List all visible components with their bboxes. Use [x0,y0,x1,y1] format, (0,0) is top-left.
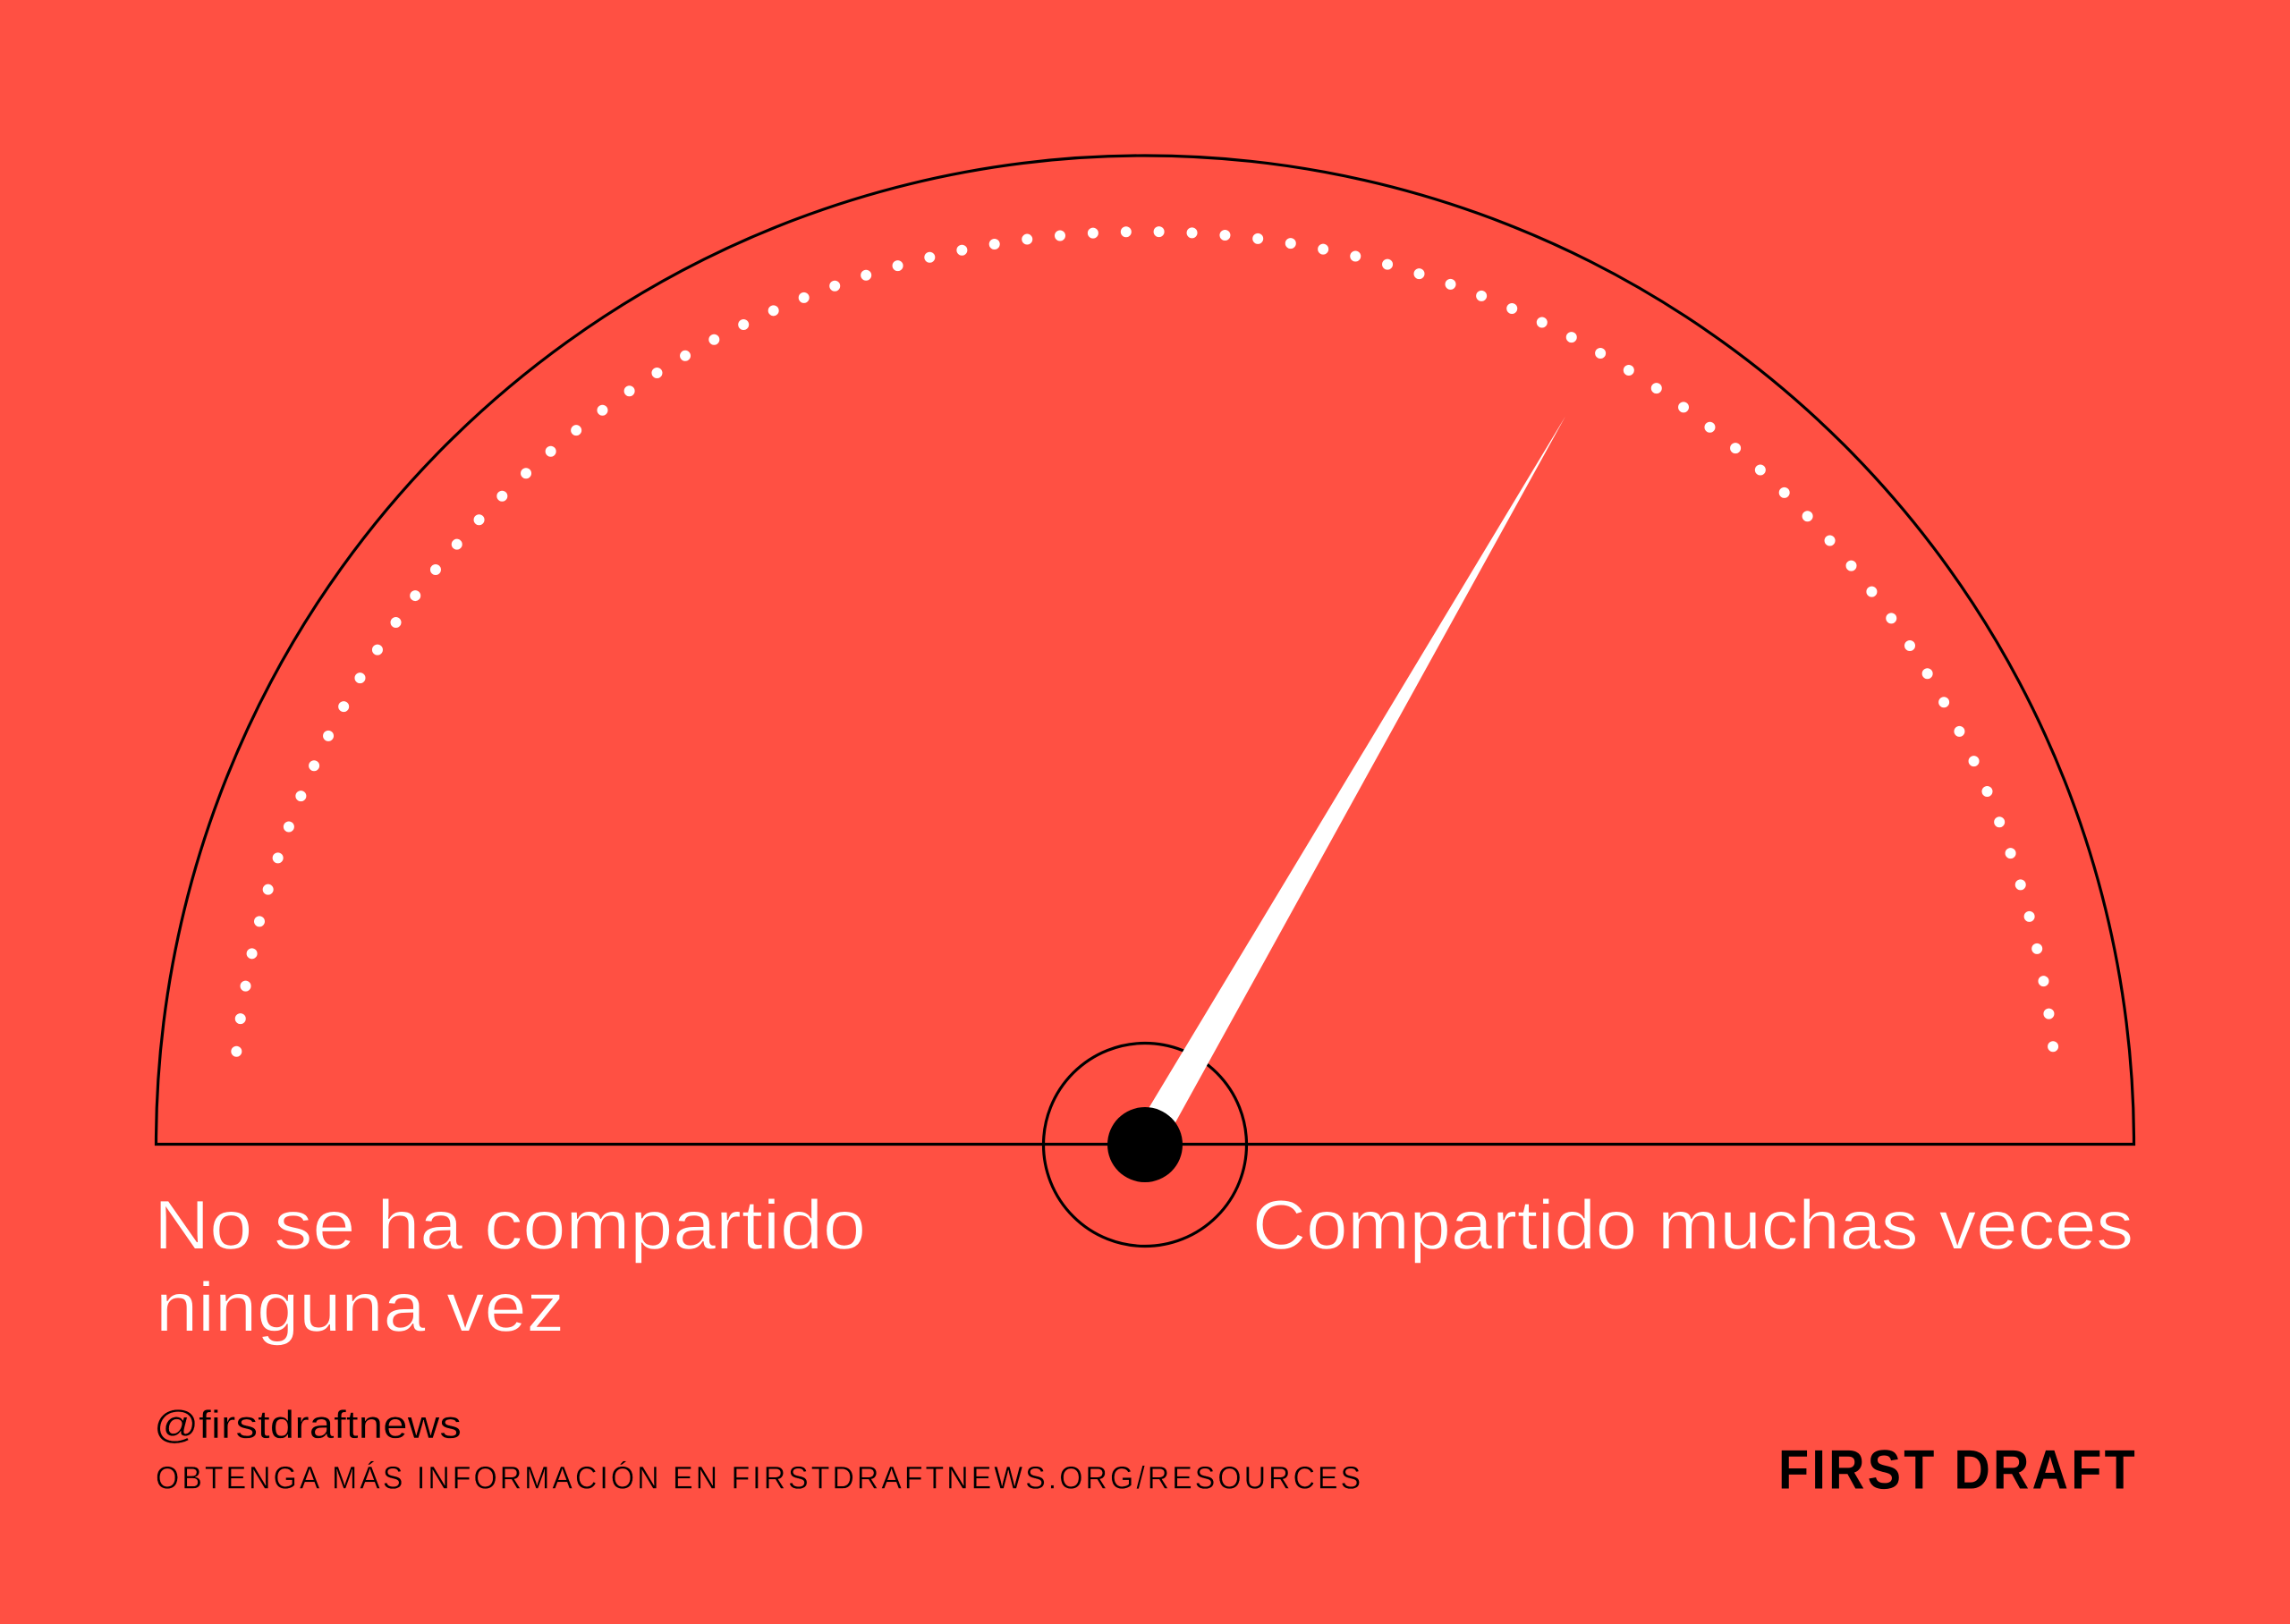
label: low end of the scale: No se ha compartido [154,1186,866,1265]
gauge [156,156,2134,1247]
hub outer ring [1043,1043,1247,1247]
hub centre [1107,1107,1183,1182]
dotted scale arc [236,232,2053,1052]
label: low end of the scale: ninguna vez [156,1268,564,1347]
needle [1142,417,1565,1132]
logo wordmark: FIRST DRAFT [1778,1440,2135,1501]
social handle: @firstdraftnews [154,1403,462,1447]
footer call to action: OBTENGA MÁS INFORMACIÓN EN FIRSTDRAFTNEWS.ORG/RESOURCES [156,1459,1361,1495]
gauge outline: semicircle [156,156,2134,1145]
label: high end of the scale: Compartido muchas veces [1252,1186,2133,1265]
